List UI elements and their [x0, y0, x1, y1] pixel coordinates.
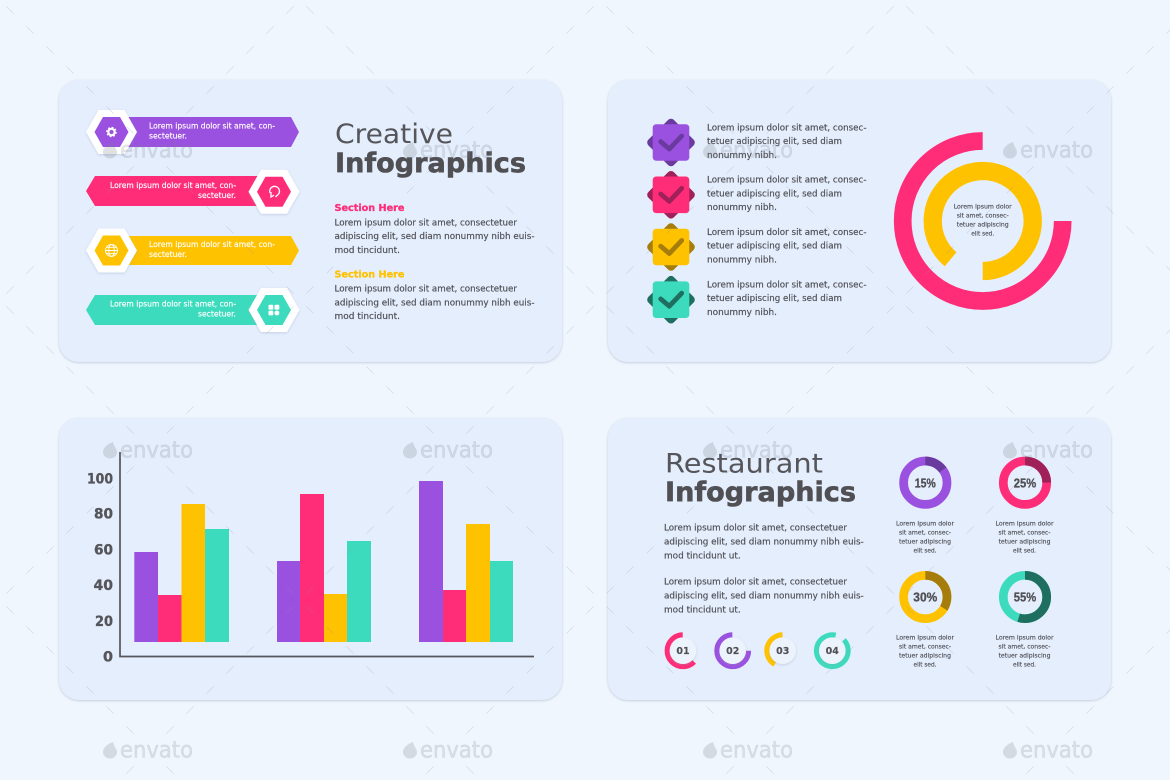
caption: 55%: Lorem ipsum dolor — [996, 634, 1054, 642]
step ring 04: 04 — [826, 646, 839, 657]
text block: paragraph 1 — [664, 524, 864, 561]
ring caption: Lorem ipsum dolor — [954, 202, 1012, 210]
caption: 30%: tetuer adipiscing — [899, 652, 951, 660]
title — [335, 119, 526, 179]
caption: 55% — [996, 634, 1054, 669]
title: Infographics — [665, 477, 856, 508]
caption: 30%: Lorem ipsum dolor — [896, 634, 954, 642]
caption: 30%: sit amet, consec- — [899, 643, 951, 651]
watermarks: envato — [420, 737, 493, 763]
caption: 55%: elit sed. — [1013, 661, 1036, 669]
donut: 30%: 30% — [913, 591, 937, 605]
text block: paragraph 2: mod tincidunt ut. — [664, 605, 741, 615]
title: Infographics — [335, 148, 526, 179]
text block: item 1 — [707, 123, 866, 161]
caption: 30%: elit sed. — [914, 661, 936, 669]
caption: 15%: elit sed. — [914, 546, 936, 554]
text block: section one: Section Here — [334, 203, 405, 214]
watermarks: envato — [1020, 737, 1093, 763]
ring caption — [954, 202, 1012, 237]
text block: item 1: tetuer adipiscing elit, sed diam — [707, 137, 842, 147]
axes — [120, 452, 534, 656]
y axis labels: 60 — [94, 543, 113, 559]
donut: 55% — [1003, 575, 1047, 619]
caption: 55%: tetuer adipiscing — [998, 652, 1050, 660]
panel: checklist and rings — [608, 80, 1111, 362]
caption: 15%: Lorem ipsum dolor — [896, 519, 954, 527]
text block: section one — [334, 203, 534, 256]
watermarks: envato — [420, 137, 493, 163]
text block: section one: adipiscing elit, sed diam nonummy nibh euis- — [334, 232, 534, 242]
text block: item 2 — [707, 176, 866, 213]
banner 4: teal — [86, 288, 300, 332]
text block: paragraph 1: Lorem ipsum dolor sit amet, consectetuer — [664, 524, 847, 534]
step ring 01 — [661, 628, 705, 673]
text block: item 3: nonummy nibh. — [707, 256, 777, 266]
text block: item 1: Lorem ipsum dolor sit amet, consec- — [707, 123, 866, 133]
panel: creative infographics — [59, 80, 562, 362]
text block: section two — [334, 270, 534, 322]
text block: item 3 — [707, 228, 866, 266]
watermarks: envato — [120, 137, 193, 163]
donut: 25% — [1003, 461, 1047, 504]
text block: paragraph 2 — [664, 578, 864, 615]
text block: paragraph 1: adipiscing elit, sed diam nonummy nibh euis- — [664, 538, 864, 548]
y axis labels: 0 — [103, 650, 113, 666]
text block: item 4: nonummy nibh. — [707, 308, 777, 318]
icon: yellow check badge — [646, 222, 696, 272]
text block: section two: adipiscing elit, sed diam nonummy nibh euis- — [334, 298, 534, 308]
text block: section one: mod tincidunt. — [334, 246, 400, 256]
caption: 25%: sit amet, consec- — [998, 528, 1050, 536]
icon: purple check badge — [646, 117, 696, 168]
donut: 15%: 15% — [915, 476, 936, 490]
y axis labels: 40 — [94, 578, 113, 594]
y axis labels: 20 — [95, 614, 113, 630]
watermarks — [103, 137, 1093, 763]
text block: section two: mod tincidunt. — [334, 312, 400, 322]
caption: 25%: elit sed. — [1013, 546, 1036, 554]
text block: item 2: tetuer adipiscing elit, sed diam — [707, 189, 842, 199]
step ring 03 — [761, 629, 804, 672]
watermarks: envato — [420, 437, 493, 463]
icon: teal check badge — [646, 274, 696, 325]
title: Restaurant — [665, 448, 823, 479]
watermarks: envato — [720, 137, 793, 163]
caption: 15%: sit amet, consec- — [899, 528, 951, 536]
caption: 25%: Lorem ipsum dolor — [996, 519, 1054, 527]
icon: globe — [106, 244, 118, 256]
text block: item 4: Lorem ipsum dolor sit amet, consec- — [707, 280, 866, 290]
banner 3: yellow — [86, 228, 299, 272]
text block: section two: Section Here — [334, 270, 405, 281]
y axis labels — [87, 471, 113, 666]
banner 1: purple: Lorem ipsum dolor sit amet, con- — [149, 122, 275, 131]
ring caption: elit sed. — [971, 229, 994, 237]
bar group 3 — [419, 481, 513, 642]
donut: 55%: 55% — [1014, 591, 1036, 605]
watermarks: envato — [1020, 137, 1093, 163]
step ring 02: 02 — [726, 646, 739, 657]
caption: 25% — [996, 519, 1054, 554]
text block: paragraph 2: adipiscing elit, sed diam nonummy nibh euis- — [664, 592, 864, 602]
banner 1: purple: sectetuer. — [149, 132, 187, 141]
banner 4: teal: sectetuer. — [198, 310, 236, 319]
donut: 25%: 25% — [1014, 476, 1036, 490]
y axis labels: 100 — [87, 471, 113, 487]
banner 1: purple — [86, 110, 299, 154]
text block: item 3: Lorem ipsum dolor sit amet, consec- — [707, 228, 866, 238]
step ring 01: 01 — [676, 646, 690, 657]
watermarks: envato — [720, 437, 793, 463]
panel: restaurant infographics — [608, 418, 1111, 700]
text block: item 4: tetuer adipiscing elit, sed diam — [707, 294, 842, 304]
chart: concentric rings — [903, 141, 1063, 301]
caption: 30% — [896, 634, 954, 669]
icon: grid — [268, 305, 279, 315]
banner 3: yellow: Lorem ipsum dolor sit amet, con- — [149, 240, 275, 249]
text block: section two: Lorem ipsum dolor sit amet, consectetuer — [334, 285, 517, 295]
text block: paragraph 2: Lorem ipsum dolor sit amet, consectetuer — [664, 578, 847, 588]
watermarks: envato — [1020, 437, 1093, 463]
text block: section one: Lorem ipsum dolor sit amet, consectetuer — [334, 218, 517, 228]
text block: item 3: tetuer adipiscing elit, sed diam — [707, 242, 842, 252]
banner 2: pink: Lorem ipsum dolor sit amet, con- — [110, 181, 236, 190]
bar group 1 — [134, 504, 229, 642]
watermarks: envato — [120, 737, 193, 763]
caption: 15% — [896, 519, 954, 554]
donut: 30% — [904, 575, 947, 619]
watermarks: envato — [720, 737, 793, 763]
title — [665, 448, 856, 508]
title: Creative — [335, 119, 453, 150]
icon: pink check badge — [646, 169, 696, 220]
banner 2: pink: sectetuer. — [198, 191, 236, 200]
text block: item 4 — [707, 280, 866, 318]
step ring 03: 03 — [776, 646, 789, 657]
text block: item 2: nonummy nibh. — [707, 203, 777, 213]
step ring 04 — [810, 628, 855, 673]
watermarks: envato — [120, 437, 193, 463]
y axis labels: 80 — [94, 507, 113, 523]
icon: gear — [107, 127, 116, 137]
icon: headset — [270, 186, 279, 197]
text block: item 2: Lorem ipsum dolor sit amet, consec- — [707, 176, 866, 186]
banner 2: pink — [86, 170, 300, 214]
ring caption: sit amet, consec- — [957, 211, 1009, 219]
caption: 55%: sit amet, consec- — [998, 643, 1050, 651]
bar group 2 — [277, 494, 371, 642]
caption: 15%: tetuer adipiscing — [899, 537, 951, 545]
banner 4: teal: Lorem ipsum dolor sit amet, con- — [110, 300, 236, 309]
caption: 25%: tetuer adipiscing — [998, 537, 1050, 545]
banner 3: yellow: sectetuer. — [149, 250, 187, 259]
ring caption: tetuer adipiscing — [957, 220, 1009, 228]
donut: 15% — [904, 461, 947, 504]
step ring 02 — [717, 635, 748, 666]
text block: paragraph 1: mod tincidunt ut. — [664, 551, 741, 561]
text block: item 1: nonummy nibh. — [707, 151, 777, 161]
panel: bar chart — [59, 418, 562, 700]
